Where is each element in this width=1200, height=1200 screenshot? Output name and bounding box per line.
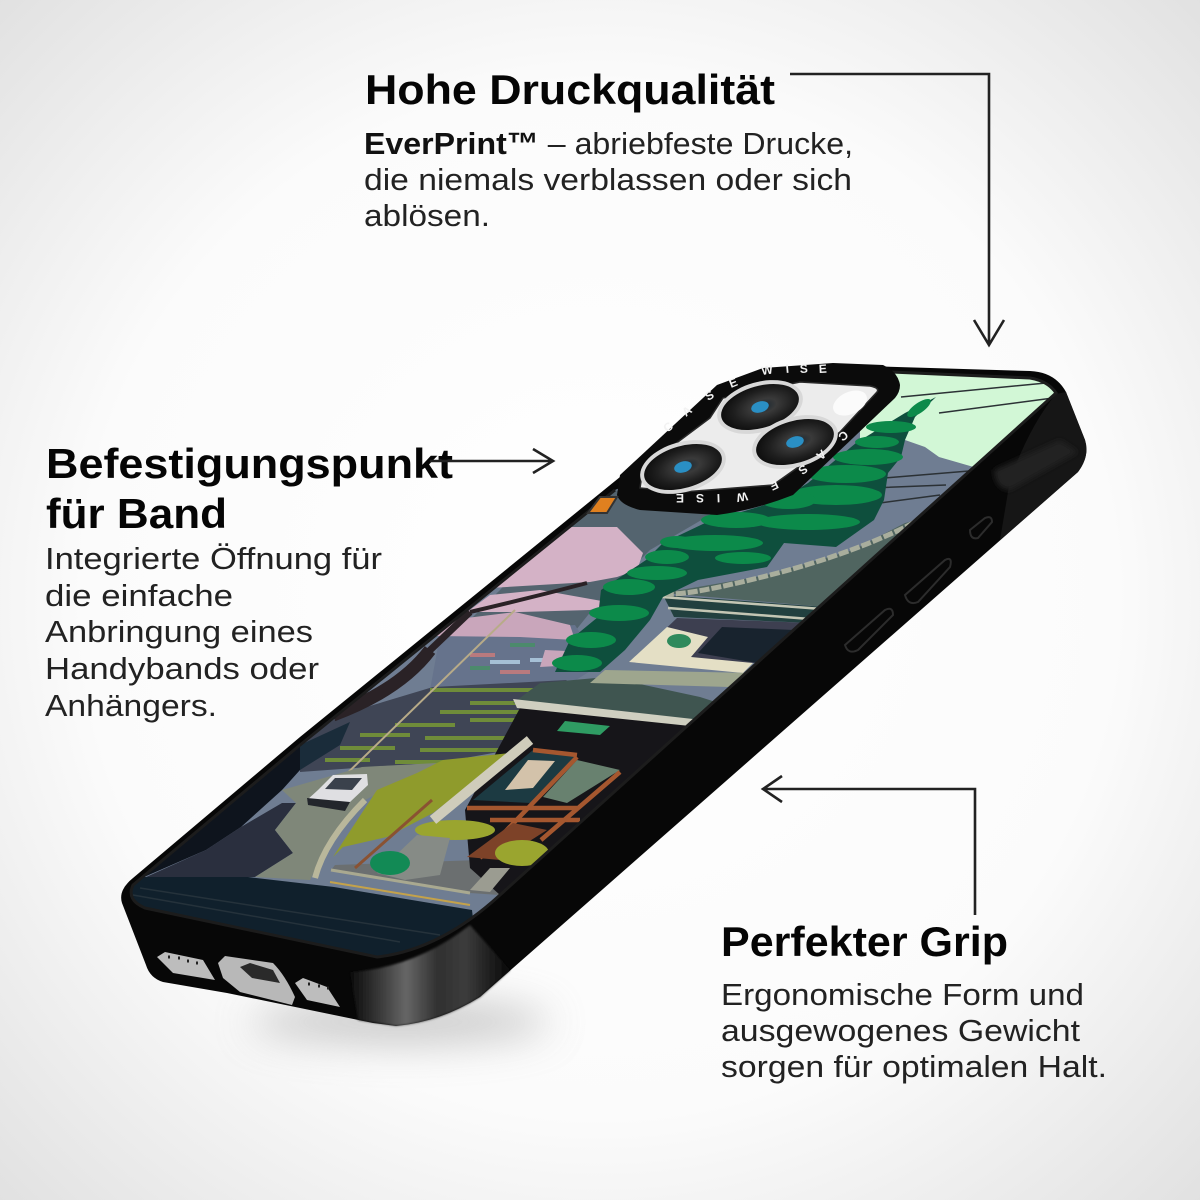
right speaker grille — [295, 978, 340, 1007]
arrow: print quality — [790, 74, 1004, 345]
ring lettering top: CASEWISE — [660, 362, 827, 435]
lower roof white strip — [513, 699, 693, 726]
phone case — [100, 350, 1100, 1026]
dark teal upper sky — [473, 490, 710, 628]
bottom ports — [157, 952, 340, 1007]
band attachment slot — [588, 497, 617, 513]
right side lighter edge — [1000, 392, 1086, 540]
shop sign — [557, 721, 610, 735]
road shadow — [144, 803, 296, 878]
cream wall — [629, 627, 753, 673]
upper eaves — [663, 595, 825, 623]
lens right — [746, 406, 844, 478]
module highlight — [829, 385, 871, 421]
callout: print quality: ablösen. — [364, 198, 490, 233]
screen rim — [131, 372, 1056, 957]
yellow-green bushes — [333, 753, 510, 857]
car — [307, 774, 368, 811]
wooden posts — [355, 800, 432, 868]
body text: Ergonomische Form und — [721, 977, 1084, 1012]
callout: print quality: die niemals verblassen oder sich — [364, 162, 852, 197]
base slate sky — [145, 431, 972, 916]
left dark tree shadow — [146, 747, 300, 876]
upper roof — [674, 522, 910, 606]
lens top — [711, 371, 809, 443]
cherry blossoms middle — [467, 590, 613, 612]
mint sky — [860, 374, 1054, 466]
phone drop shadow — [250, 1000, 550, 1044]
pine foliage — [552, 396, 933, 671]
shop door — [467, 823, 547, 860]
green shrub — [370, 851, 410, 875]
callout: grip: ausgewogenes Gewicht — [721, 1013, 1080, 1048]
side switch highlight — [994, 440, 1078, 490]
lower roof — [513, 678, 712, 719]
arrow: strap attachment — [430, 449, 553, 473]
foreground dark street — [132, 877, 473, 956]
stone pillar — [433, 740, 530, 820]
tree trunk — [470, 583, 587, 612]
power lines — [870, 383, 1053, 503]
wall shadow — [668, 618, 800, 663]
callout: grip — [721, 918, 1107, 1084]
glossy bottom corner — [350, 925, 510, 1026]
heading: Befestigungspunkt — [46, 440, 453, 487]
cherry blossoms bottom — [540, 650, 565, 667]
city roofs — [470, 645, 555, 672]
charging port — [218, 956, 295, 1005]
shop window left — [473, 750, 577, 803]
road kerb — [315, 800, 365, 878]
side buttons — [845, 517, 992, 652]
hillside — [300, 680, 567, 772]
arrow: grip — [763, 776, 975, 915]
left grille holes — [168, 957, 198, 963]
right grille holes — [308, 984, 329, 988]
small bushes — [415, 820, 549, 866]
callout: strap attachment: die einfache — [45, 578, 233, 613]
callout: strap attachment: Anhängers. — [45, 688, 217, 723]
ring lettering bottom: CASEWISE — [676, 428, 851, 505]
planter stones — [470, 868, 510, 892]
body text: EverPrint™ – abriebfeste Drucke, — [364, 126, 853, 161]
callout: strap attachment: Anbringung eines — [45, 614, 313, 649]
callout: grip: sorgen für optimalen Halt. — [721, 1049, 1107, 1084]
screen artwork — [132, 374, 1054, 956]
callout: strap attachment: für Band — [46, 490, 227, 537]
distant utility pole — [348, 609, 516, 771]
left dark building — [300, 722, 350, 770]
pine tree silhouette — [555, 397, 936, 672]
left speaker grille — [157, 952, 215, 980]
case body — [121, 365, 1086, 1026]
cherry blossoms upper — [490, 527, 643, 588]
shop dark body — [465, 708, 700, 895]
body text: Integrierte Öffnung für — [45, 541, 382, 576]
callout: print quality — [364, 66, 853, 233]
shop poster — [505, 760, 555, 790]
callout: strap attachment: Handybands oder — [45, 651, 319, 686]
camera ring — [617, 362, 900, 515]
stone planter — [377, 835, 450, 880]
window — [698, 627, 794, 663]
pavement — [331, 860, 500, 895]
green emblem — [667, 634, 691, 648]
callout: strap attachment — [45, 440, 453, 723]
lens left — [634, 431, 732, 503]
balcony — [590, 670, 753, 687]
heading: Perfekter Grip — [721, 918, 1008, 965]
cherry blossoms lower — [433, 612, 575, 640]
camera module — [640, 382, 878, 492]
distant city — [430, 625, 588, 688]
hillside green terraces — [325, 690, 540, 762]
heading: Hohe Druckqualität — [365, 66, 775, 113]
road — [255, 763, 437, 880]
shop window right — [543, 760, 620, 803]
shop wooden frame — [467, 750, 620, 858]
charging port opening — [240, 963, 280, 983]
